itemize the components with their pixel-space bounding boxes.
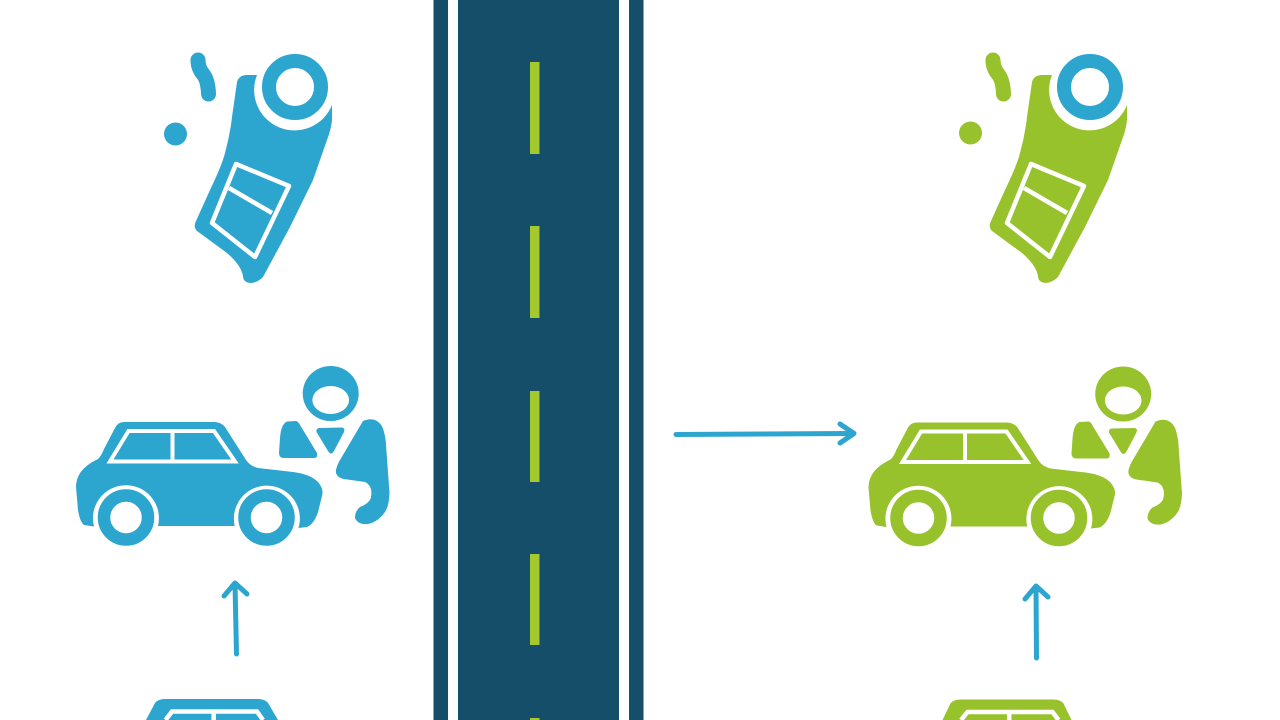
car <box>868 422 1115 540</box>
arrow: up, right column <box>1025 586 1048 658</box>
icon: bottom car, green <box>942 700 1072 720</box>
arrow: up, left column <box>224 583 247 654</box>
person <box>279 366 390 524</box>
arrow: right, from road to green car <box>676 424 854 443</box>
icon: overturned car, green with blue wheel <box>959 60 1127 283</box>
person <box>1072 366 1182 525</box>
icon: car with person, green <box>868 366 1182 540</box>
icon: overturned car, blue <box>164 60 332 283</box>
road <box>434 0 644 720</box>
car <box>76 422 322 540</box>
icon: car with person, blue <box>76 366 390 540</box>
icon: bottom car, blue <box>146 699 278 720</box>
